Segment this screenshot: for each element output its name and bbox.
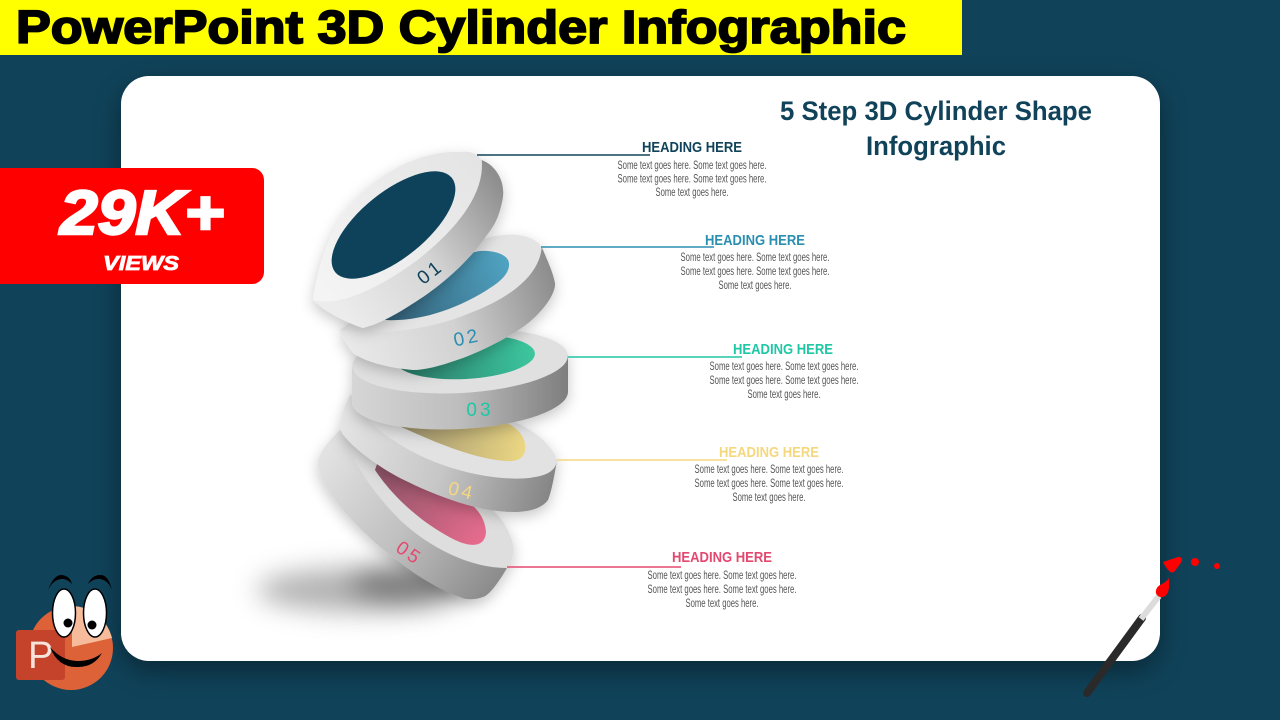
cylinder 03: 03 <box>466 400 494 421</box>
cylinder 02: 02 <box>452 325 483 351</box>
ground shadow <box>257 563 467 612</box>
infographic title: Infographic <box>866 131 1006 161</box>
step 2 label <box>541 232 830 292</box>
cylinder 04 <box>340 385 557 512</box>
step 2 label: HEADING HERE <box>705 232 805 249</box>
step 1 label: Some text goes here. Some text goes here. <box>618 158 766 172</box>
step 3 label: Some text goes here. Some text goes here. <box>710 359 858 373</box>
cylinder 01 <box>313 152 503 328</box>
step 2 label: Some text goes here. Some text goes here. <box>680 264 830 278</box>
step 2 label: Some text goes here. Some text goes here. <box>680 250 830 264</box>
cylinder 04: 04 <box>446 478 477 505</box>
step 3 label: Some text goes here. Some text goes here. <box>710 373 858 387</box>
step 1 label <box>477 139 766 199</box>
step 5 label: Some text goes here. <box>686 596 758 610</box>
icon: paint brush <box>1087 557 1220 693</box>
icon: PowerPoint mascot <box>16 575 113 690</box>
step 5 label: Some text goes here. Some text goes here. <box>648 582 796 596</box>
step 5 label: Some text goes here. Some text goes here. <box>648 568 796 582</box>
cylinder 03 <box>350 323 570 429</box>
title banner: PowerPoint 3D Cylinder Infographic <box>16 1 906 53</box>
views badge: 29K+ <box>59 179 224 248</box>
step 1 label: Some text goes here. <box>656 185 728 199</box>
infographic title <box>780 96 1092 161</box>
step 3 label: HEADING HERE <box>733 341 833 358</box>
step 3 label: Some text goes here. <box>748 387 820 401</box>
cylinder 02 <box>340 235 555 370</box>
step 1 label: HEADING HERE <box>642 139 742 156</box>
icon: PowerPoint mascot: P <box>28 635 53 677</box>
step 4 label: Some text goes here. <box>732 490 806 504</box>
step 4 label: Some text goes here. Some text goes here. <box>694 476 844 490</box>
step 4 label: Some text goes here. Some text goes here. <box>694 462 844 476</box>
step 3 label <box>568 341 858 401</box>
cylinder 01: 01 <box>414 256 448 289</box>
step 4 label: HEADING HERE <box>719 444 819 461</box>
infographic title: 5 Step 3D Cylinder Shape <box>780 96 1092 126</box>
step 5 label: HEADING HERE <box>672 549 772 566</box>
step 5 label <box>507 549 796 610</box>
step 2 label: Some text goes here. <box>718 278 792 292</box>
step 1 label: Some text goes here. Some text goes here. <box>618 172 766 186</box>
step 4 label <box>557 444 844 504</box>
panel: white card <box>121 76 1160 671</box>
views badge <box>0 168 264 284</box>
cylinder 05: 05 <box>392 537 426 570</box>
views badge: VIEWS <box>103 253 180 275</box>
cylinder 05 <box>318 430 514 599</box>
